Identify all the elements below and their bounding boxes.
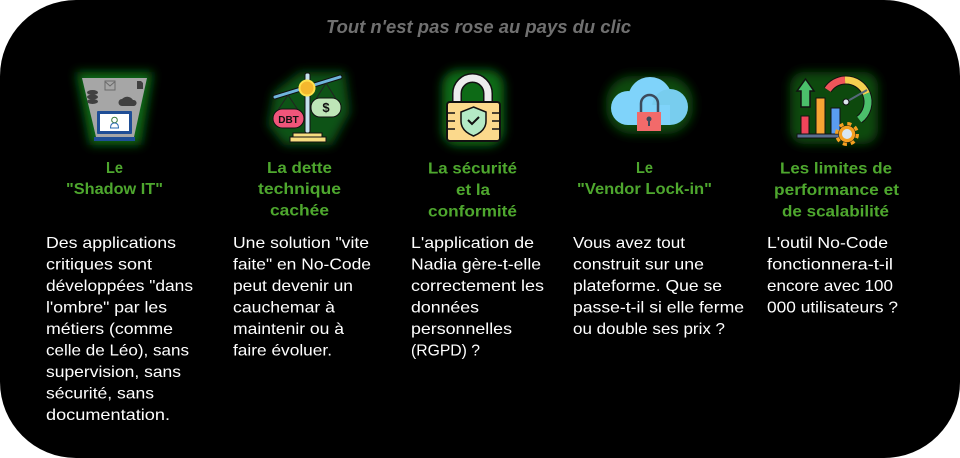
icon: balance scale — [268, 72, 350, 145]
icon: shadow IT — [76, 72, 153, 145]
text: dette description: cauchemar à — [233, 300, 335, 316]
text: dette description: Une solution "vite — [233, 235, 369, 252]
heading: Le Vendor Lock-in — [577, 160, 712, 198]
text: sécurité description: (RGPD) ? — [411, 342, 480, 360]
heading: Le Shadow IT — [66, 160, 163, 198]
text: Shadow IT description: celle de Léo), sans — [46, 342, 189, 360]
icon: performance chart — [790, 72, 878, 144]
text: Shadow IT description: sécurité, sans — [46, 386, 154, 402]
text: limites description: L'outil No-Code — [767, 235, 888, 252]
title: Tout n'est pas rose au pays du clic — [326, 17, 631, 37]
panel: limites — [767, 72, 899, 316]
heading: Les limites de performance et de scalabilité: performance et — [774, 182, 899, 199]
text: limites description: fonctionnera-t-il — [767, 256, 893, 274]
heading: Les limites de performance et de scalabilité — [774, 160, 899, 220]
text: Vendor description: construit sur une — [573, 256, 704, 274]
panel: Vendor Lock-in — [573, 76, 744, 338]
text: Shadow IT description: critiques sont — [46, 256, 153, 274]
text: limites description: encore avec 100 — [767, 278, 893, 295]
text: Vendor description: ou double ses prix ? — [573, 321, 725, 338]
icon: padlock shield — [442, 70, 504, 146]
text: sécurité description: Nadia gère-t-elle — [411, 256, 541, 274]
text: Shadow IT description: métiers (comme — [46, 321, 173, 338]
heading: La sécurité et la conformité: et la — [456, 182, 490, 199]
text: sécurité description: données — [411, 300, 479, 316]
icon: balance scale: $ — [322, 100, 330, 115]
panel: sécurité — [411, 70, 544, 360]
heading: La sécurité et la conformité: conformité — [428, 204, 517, 220]
text: dette description: faire évoluer. — [233, 342, 332, 360]
heading: La dette technique cachée: cachée — [270, 202, 329, 220]
heading: Le Vendor Lock-in: Le — [636, 160, 653, 177]
text: sécurité description: personnelles — [411, 321, 512, 338]
heading: Le Shadow IT: Le — [106, 160, 123, 177]
text: Shadow IT description: Des applications — [46, 235, 176, 252]
text: limites description: 000 utilisateurs ? — [767, 300, 898, 316]
heading: La dette technique cachée: La dette — [267, 160, 332, 177]
text: sécurité description — [411, 235, 544, 360]
text: Vendor description: passe-t-il si elle ferme — [573, 300, 744, 316]
panel: Shadow IT — [46, 72, 193, 424]
icon: balance scale: DBT — [278, 115, 299, 126]
heading: Le Shadow IT: "Shadow IT" — [66, 181, 163, 198]
text: Shadow IT description: développées "dans — [46, 278, 193, 295]
heading: Les limites de performance et de scalabilité: de scalabilité — [782, 204, 889, 220]
heading: La sécurité et la conformité — [428, 160, 517, 220]
text: dette description — [233, 235, 371, 360]
heading: La sécurité et la conformité: La sécurité — [428, 160, 517, 178]
text: Shadow IT description: l'ombre" par les — [46, 300, 167, 316]
text: dette description: peut devenir un — [233, 278, 353, 295]
heading: Le Vendor Lock-in: "Vendor Lock-in" — [577, 181, 712, 198]
text: sécurité description: correctement les — [411, 278, 544, 295]
text: limites description — [767, 235, 898, 316]
panel: dette technique — [233, 72, 371, 360]
heading: Les limites de performance et de scalabilité: Les limites de — [780, 160, 892, 178]
text: dette description: maintenir ou à — [233, 321, 344, 338]
text: Shadow IT description: documentation. — [46, 407, 170, 424]
heading: La dette technique cachée: technique — [258, 181, 341, 198]
text: Vendor description — [573, 235, 744, 338]
text: Shadow IT description: supervision, sans — [46, 364, 181, 381]
text: sécurité description: L'application de — [411, 235, 534, 252]
text: dette description: faite" en No-Code — [233, 256, 371, 274]
heading: La dette technique cachée — [258, 160, 341, 220]
text: Shadow IT description — [46, 235, 193, 424]
icon: cloud lock — [606, 76, 693, 134]
text: Vendor description: plateforme. Que se — [573, 278, 722, 295]
text: Vendor description: Vous avez tout — [573, 235, 686, 252]
